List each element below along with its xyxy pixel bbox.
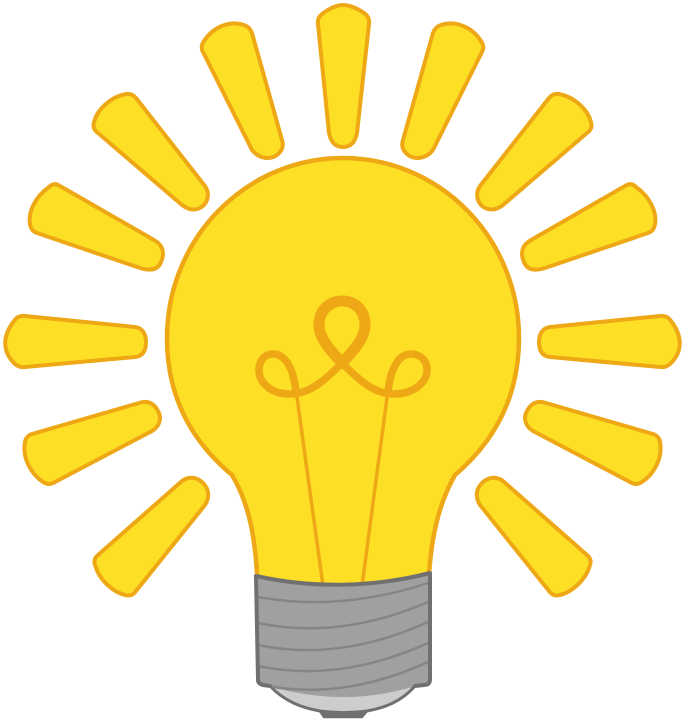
ray: upper right 3 [522, 184, 655, 270]
ray: top [318, 5, 369, 147]
base body [256, 573, 430, 697]
ray: upper left 3 [30, 184, 163, 270]
ray: right [539, 316, 680, 367]
ray: lower left 1 [24, 402, 160, 484]
center loop [319, 301, 365, 363]
ray: upper left 1 [202, 23, 283, 158]
ray: lower right 1 [525, 402, 661, 484]
ray: upper right 2 [477, 94, 592, 210]
bulb glass [167, 158, 519, 592]
ray: lower left 2 [94, 478, 208, 596]
base outline [256, 573, 430, 686]
support wires [296, 390, 388, 586]
rays on the top and right [318, 5, 680, 596]
ray: lower right 2 [477, 478, 591, 596]
rays on the left [5, 23, 283, 596]
contact tip [320, 711, 367, 717]
ray: left [5, 316, 146, 367]
ray: upper right 1 [402, 23, 483, 158]
lower cap [270, 686, 415, 712]
screw threads [258, 583, 428, 690]
ray: upper left 2 [94, 94, 208, 210]
screw base [256, 573, 430, 697]
right curl [342, 354, 427, 394]
left curl [259, 354, 342, 394]
filament [259, 301, 427, 586]
